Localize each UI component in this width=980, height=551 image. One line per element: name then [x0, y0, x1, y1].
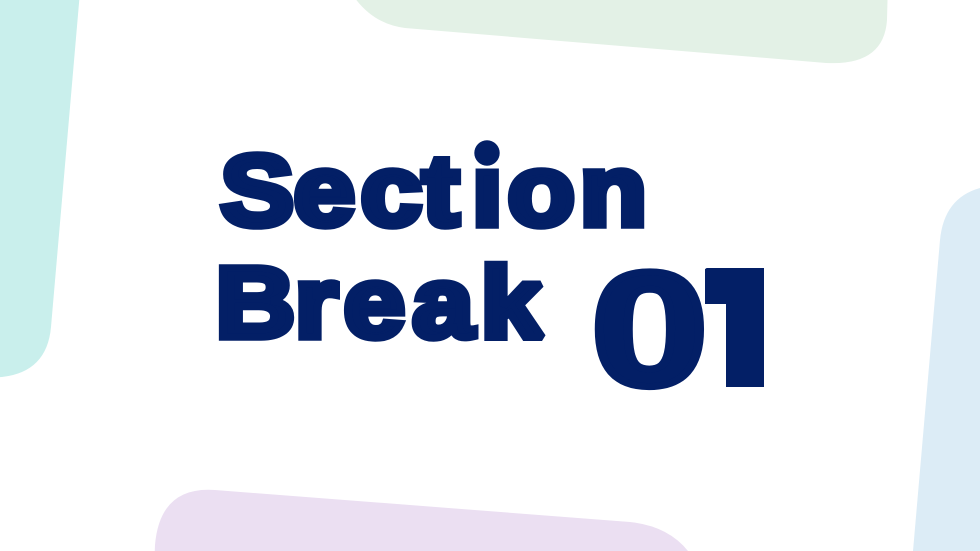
section number 01	[594, 268, 764, 390]
section number 01: 0	[591, 238, 708, 419]
section number 01: 1	[692, 234, 787, 424]
panel: blue shape right	[913, 186, 980, 551]
panel: green shape top	[352, 0, 888, 63]
title: Break: Break	[216, 248, 542, 359]
panel: purple shape bottom	[154, 490, 700, 551]
title: Section: Section	[221, 136, 647, 247]
panel: teal shape top left	[0, 0, 81, 379]
